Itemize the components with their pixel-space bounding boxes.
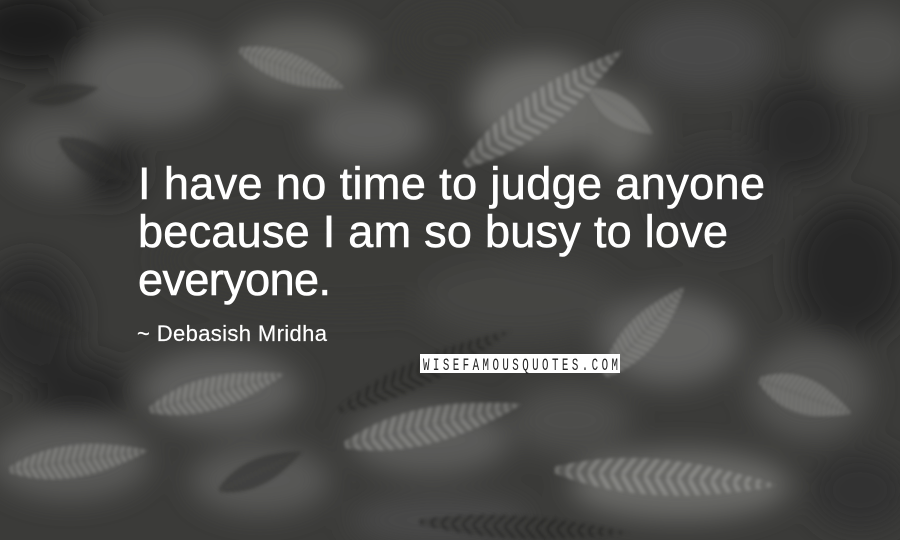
quote text: everyone.	[138, 254, 331, 305]
quote text: I have no time to judge anyone	[138, 158, 765, 209]
logo: wisefamousquotes badge: WISEFAMOUSQUOTES.COM	[423, 357, 618, 376]
quote text: because I am so busy to love	[138, 206, 728, 257]
quote text	[138, 158, 765, 305]
author attribution: ~ Debasish Mridha	[137, 321, 328, 346]
